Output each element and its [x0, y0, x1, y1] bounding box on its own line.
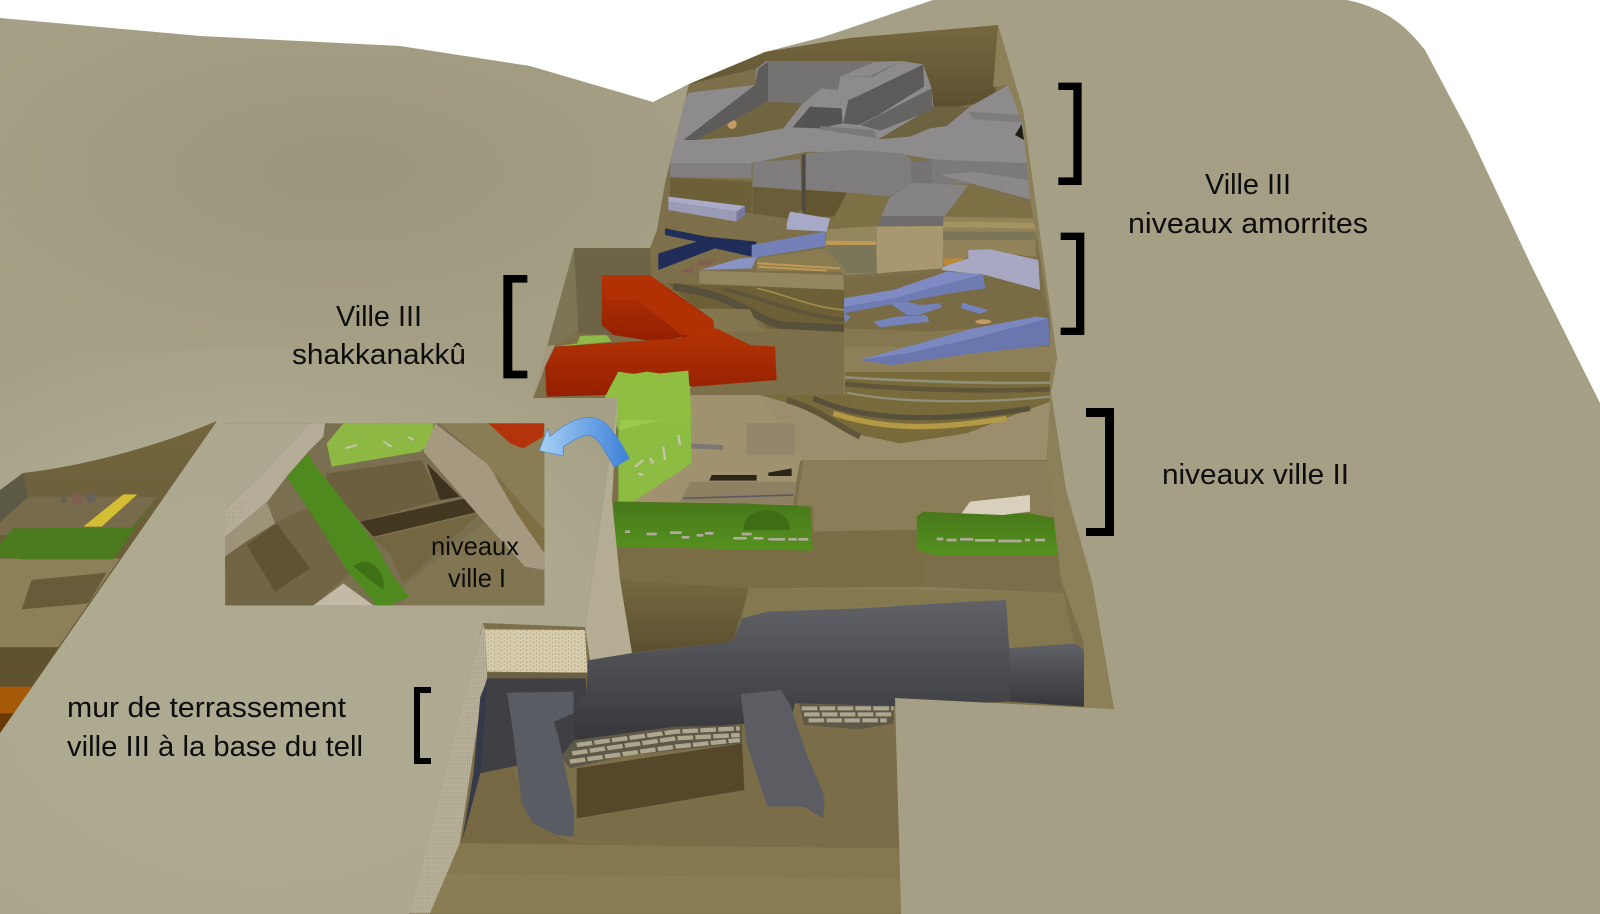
label: niveaux ville I: ville I: [448, 563, 506, 593]
label: niveaux ville I: [431, 531, 519, 593]
bracket: niveaux ville II: [1086, 408, 1114, 536]
label: Ville III niveaux amorrites: niveaux amorrites: [1128, 208, 1368, 240]
bracket: mur de terrassement: [414, 687, 431, 764]
label: mur de terrassement: mur de terrassement: [67, 692, 346, 724]
right trench margin: [993, 25, 1114, 709]
upper trench: amorite levels: [658, 25, 1050, 400]
label: Ville III shakkanakku: Ville III: [336, 301, 422, 333]
main excavation trench: [400, 0, 1140, 914]
stone masonry: [561, 704, 894, 768]
label: Ville III shakkanakku: [292, 301, 466, 371]
left excavation pit: [0, 400, 220, 733]
label: mur de terrassement: ville III à la base du tell: [67, 731, 363, 763]
arrow: blue curved arrow: [539, 417, 629, 467]
bracket: niveaux amorrites lower: [1061, 233, 1084, 335]
raised block with blue walls: [844, 272, 1050, 400]
dark green wall west: [613, 502, 813, 551]
hill slope strip: [585, 398, 632, 660]
grey terrace wall: [574, 600, 1011, 740]
label: Ville III niveaux amorrites: Ville III: [1205, 169, 1291, 201]
label: mur de terrassement: [67, 692, 363, 763]
label: niveaux ville II: niveaux ville II: [1162, 459, 1349, 491]
bracket: shakkanakku: [503, 275, 527, 378]
inset view: niveaux ville I: [225, 423, 544, 605]
label: Ville III niveaux amorrites: [1128, 169, 1368, 240]
red wall room: [533, 248, 777, 420]
bright green wall: [605, 380, 692, 502]
lower trench: base wall: [400, 580, 1086, 913]
bracket: niveaux amorrites upper: [1058, 83, 1082, 185]
label: niveaux ville I: niveaux: [431, 531, 519, 561]
dark green wall east: [917, 495, 1064, 555]
right buttress: [741, 690, 825, 818]
left buttress: [507, 692, 574, 837]
label: Ville III shakkanakku: shakkanakkû: [292, 339, 466, 371]
middle trench: ville II section: [605, 372, 1068, 620]
